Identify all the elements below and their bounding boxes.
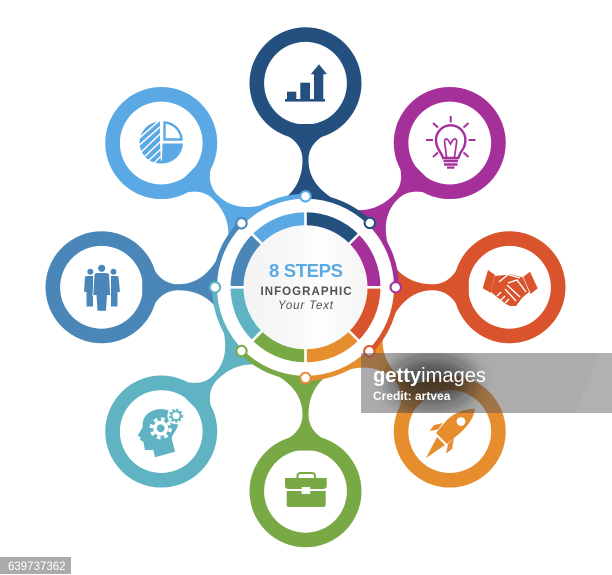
icon: group of people bbox=[84, 265, 120, 311]
icon: head with gears bbox=[138, 407, 185, 457]
icon: pie chart bbox=[136, 120, 183, 165]
connector dots bbox=[210, 191, 401, 383]
icon: bar chart with arrow bbox=[285, 64, 327, 102]
center text: Your Text bbox=[278, 300, 334, 312]
image id tag bbox=[0, 557, 71, 574]
node: step 1 navy ring and stem bbox=[257, 35, 354, 230]
hub backing disc bbox=[216, 198, 394, 376]
node: step 7 steel blue ring and stem bbox=[53, 239, 248, 336]
node: step 8 light blue ring and stem bbox=[92, 74, 299, 281]
center text: INFOGRAPHIC bbox=[260, 286, 352, 298]
node: step 6 teal ring and stem bbox=[92, 293, 299, 500]
icon: light bulb bbox=[426, 116, 476, 168]
node: step 5 green ring and stem bbox=[257, 345, 354, 540]
center text bbox=[260, 260, 352, 312]
icon: rocket bbox=[426, 409, 475, 458]
image id tag: 639737362 bbox=[8, 561, 66, 573]
node: step 2 magenta ring and stem bbox=[312, 74, 519, 281]
watermark band bbox=[361, 353, 612, 413]
icon: handshake bbox=[483, 270, 538, 306]
icon: briefcase bbox=[285, 473, 327, 507]
outer connecting ring arcs bbox=[214, 196, 396, 378]
node: step 4 orange ring and stem bbox=[312, 293, 519, 500]
node: step 3 red ring and stem bbox=[363, 239, 558, 336]
inner segmented donut bbox=[226, 208, 385, 367]
center text: 8 STEPS bbox=[269, 260, 343, 281]
watermark logo text: gettyimages bbox=[373, 365, 486, 387]
center disc bbox=[244, 226, 367, 349]
watermark credit text: Credit: artvea bbox=[373, 389, 451, 403]
